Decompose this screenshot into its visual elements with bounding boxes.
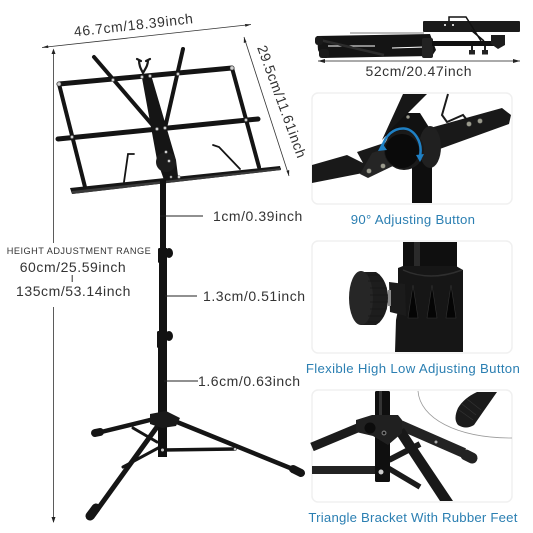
dimension: width <box>42 10 251 48</box>
panel: 90 degree adjusting button <box>312 93 512 204</box>
tube diameter: top: 1cm/0.39inch <box>213 208 303 224</box>
rubber foot detail <box>456 392 497 428</box>
folded length arrow <box>318 59 520 63</box>
caption: triangle bracket: Triangle Bracket With Rubber Feet <box>308 510 518 525</box>
icon: blue rotation arrow <box>378 128 424 162</box>
tripod legs <box>90 411 301 517</box>
sheet holder desk <box>57 49 281 194</box>
bracket <box>389 282 406 316</box>
knob <box>361 272 388 325</box>
height adjustment range text: 135cm/53.14inch <box>16 283 131 299</box>
height adjustment range text: HEIGHT ADJUSTMENT RANGE <box>7 246 151 256</box>
lyre clip <box>137 59 150 73</box>
height adjustment range text: 60cm/25.59inch <box>20 259 126 275</box>
panel: triangle bracket and feet <box>312 390 512 502</box>
tube diameter: middle: 1.3cm/0.51inch <box>203 288 306 304</box>
dimension: width: 46.7cm/18.39inch <box>73 10 194 39</box>
zoom circle arc <box>418 391 512 438</box>
main music stand <box>57 49 301 517</box>
folded stand <box>315 17 520 58</box>
tube diameter: bottom: 1.6cm/0.63inch <box>198 373 301 389</box>
caption: height button: Flexible High Low Adjusting Button <box>306 361 520 376</box>
panel: flexible height knob <box>312 241 512 353</box>
telescopic pole <box>157 180 173 413</box>
dimension: height arrow <box>52 48 56 523</box>
height adjustment range text <box>7 246 151 299</box>
folded length label: 52cm/20.47inch <box>366 63 472 79</box>
caption: 90 degree button: 90° Adjusting Button <box>351 212 475 227</box>
dimension: depth: 29.5cm/11.61inch <box>254 43 310 160</box>
